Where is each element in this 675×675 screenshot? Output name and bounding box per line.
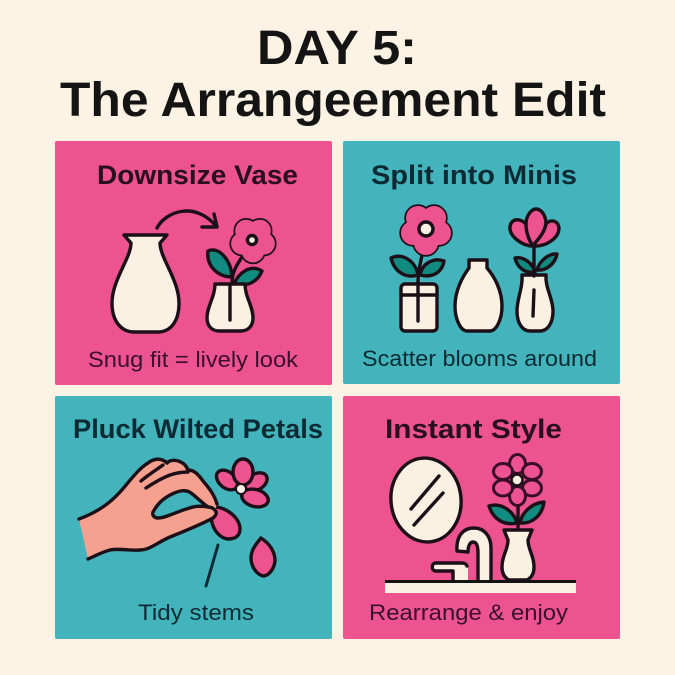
panel: instant style [343,396,620,639]
heading: pluck wilted petals: Pluck Wilted Petals [73,414,323,444]
title: DAY 5: [257,22,417,75]
panel: split into minis [343,141,620,384]
icon: tulip in vase [510,209,559,331]
icon: flower in vase [489,454,544,580]
heading: split into minis: Split into Minis [371,160,577,190]
arrow: to smaller vase [157,211,217,228]
caption: tidy stems: Tidy stems [138,600,254,625]
icon: flower in glass [391,206,451,331]
icon: mirror [387,455,465,545]
icon: middle vase [455,260,502,331]
icon: flower in small vase [207,220,275,331]
icon: large vase [112,235,179,332]
heading: instant style: Instant Style [385,414,562,444]
heading: downsize vase: Downsize Vase [97,160,298,190]
caption: rearrange and enjoy: Rearrange & enjoy [369,600,568,625]
icon: wilted flower [213,459,270,510]
title: The Arrangeement Edit [60,74,606,127]
caption: snug fit: Snug fit = lively look [88,347,299,372]
caption: scatter blooms: Scatter blooms around [362,346,597,371]
title [60,22,606,127]
icon: faucet [432,528,491,580]
panel: downsize vase [55,141,332,385]
panel: pluck wilted petals [55,396,332,639]
stem line [206,545,218,586]
icon: plucked petal [211,507,240,539]
icon: hand [79,459,217,559]
shelf [385,580,576,593]
icon: falling petal [251,538,275,576]
